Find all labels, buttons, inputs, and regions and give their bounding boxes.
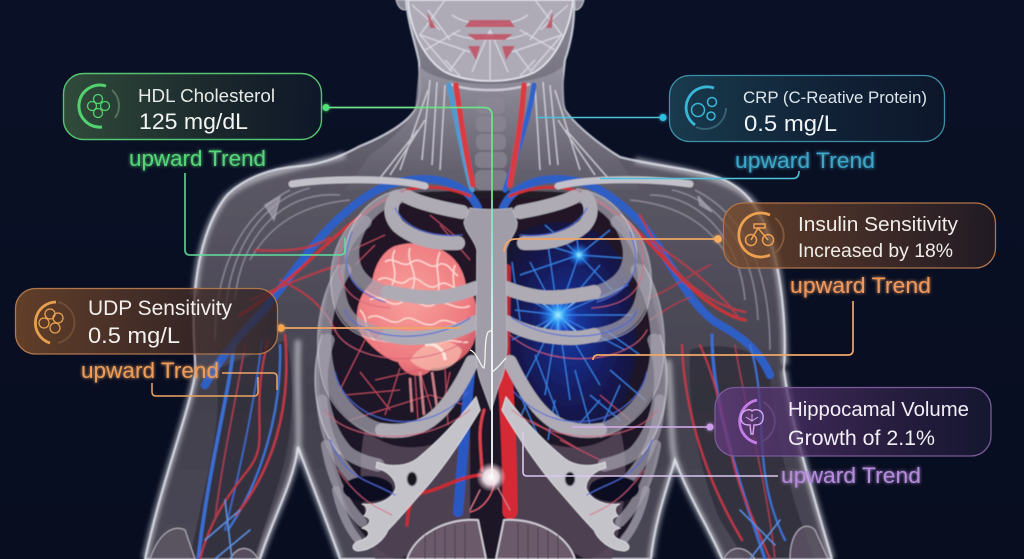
HDL anchor dot bbox=[322, 104, 330, 111]
neck and chest large vessels bbox=[205, 85, 770, 525]
right chest neural glow bbox=[505, 222, 636, 430]
HDL value: 125 mg/dL bbox=[139, 109, 248, 134]
rib cage left half bbox=[315, 189, 480, 551]
UDP connector lines bbox=[152, 328, 460, 396]
lower abdomen purple bbox=[361, 430, 625, 559]
Insulin connector lines bbox=[504, 239, 853, 360]
lower-left chest vessel web bbox=[340, 215, 630, 460]
ECG trace bbox=[470, 330, 506, 372]
CRP label: CRP (C-Reative Protein) bbox=[743, 88, 927, 107]
Hippocampal anchor dot bbox=[706, 424, 714, 430]
CRP connector lines bbox=[537, 118, 799, 178]
cervical spine bbox=[475, 98, 507, 190]
central sternum signal line bbox=[470, 200, 506, 492]
UDP trend: upward Trend bbox=[81, 358, 219, 383]
icon: Insulin bicycle bbox=[739, 213, 784, 257]
clavicles bbox=[292, 180, 690, 186]
Hippocampal connector lines bbox=[523, 427, 778, 476]
forearm muscles bbox=[150, 526, 828, 559]
abdominal muscle fibres bbox=[425, 523, 558, 559]
Insulin trend: upward Trend bbox=[790, 273, 931, 298]
HDL trend: upward Trend bbox=[129, 146, 266, 171]
callout: Hippocampal Volume bbox=[523, 388, 991, 488]
chest cavity bbox=[319, 191, 664, 559]
arm muscle shading bbox=[190, 340, 815, 559]
CRP panel bbox=[670, 76, 944, 142]
icon: brain bbox=[740, 400, 775, 443]
Hippocampal value: Growth of 2.1% bbox=[788, 427, 935, 450]
UDP value: 0.5 mg/L bbox=[88, 323, 180, 348]
CRP trend: upward Trend bbox=[735, 148, 875, 173]
Hippocampal trend: upward Trend bbox=[781, 463, 921, 488]
callout: UDP Sensitivity bbox=[16, 288, 460, 396]
CRP anchor dot bbox=[660, 114, 666, 121]
Insulin panel bbox=[724, 203, 996, 268]
icon: CRP molecules bbox=[686, 87, 726, 129]
Insulin label: Insulin Sensitivity bbox=[798, 214, 958, 236]
callout: CRP bbox=[537, 76, 944, 178]
blue neural network bbox=[510, 222, 645, 440]
UDP label: UDP Sensitivity bbox=[88, 297, 232, 320]
shoulder muscles bbox=[215, 188, 770, 350]
Hippocampal label: Hippocamal Volume bbox=[788, 399, 969, 421]
rib cage right half bbox=[502, 189, 667, 551]
Hippocampal panel bbox=[715, 388, 991, 456]
HDL connector lines bbox=[185, 108, 492, 255]
Insulin anchor dot bbox=[714, 235, 722, 243]
UDP panel bbox=[16, 288, 278, 354]
face and neck muscles bbox=[345, 0, 640, 190]
icon: HDL cell cluster bbox=[79, 85, 119, 127]
callout: HDL Cholesterol bbox=[64, 74, 492, 255]
neural bursts bbox=[538, 243, 591, 335]
HDL label: HDL Cholesterol bbox=[138, 86, 275, 106]
callout: Insulin Sensitivity bbox=[504, 203, 996, 360]
abdominal muscles bbox=[407, 520, 575, 559]
body silhouette bbox=[145, 0, 832, 559]
lit shoulder and arm rims bbox=[145, 155, 832, 559]
Insulin value: Increased by 18% bbox=[798, 241, 953, 262]
HDL panel bbox=[64, 74, 322, 140]
icon: UDP cluster bbox=[35, 302, 74, 343]
glowing node bbox=[476, 462, 506, 492]
anatomy figure bbox=[145, 0, 832, 559]
CRP value: 0.5 mg/L bbox=[744, 111, 837, 136]
ears bbox=[396, 0, 584, 10]
brain bbox=[357, 243, 478, 376]
sternum bbox=[464, 208, 517, 410]
UDP anchor dot bbox=[277, 324, 285, 332]
arm vessels bbox=[198, 335, 785, 559]
